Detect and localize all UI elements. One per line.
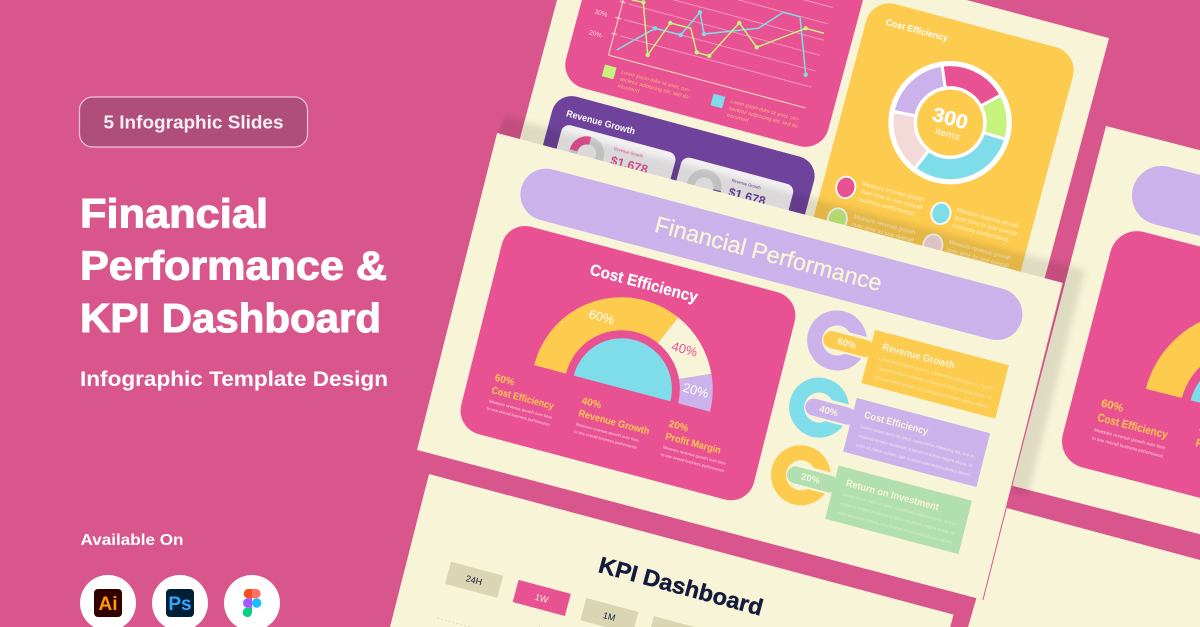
legend: profit margin: 20% xyxy=(667,419,690,435)
legend: revenue growth: 40% xyxy=(580,396,603,412)
item: 40% cost efficiency xyxy=(781,371,993,487)
axis label: 20%: 20% xyxy=(588,29,603,40)
donut chart: items xyxy=(934,126,962,142)
donut chart: 300 xyxy=(930,104,970,134)
item: 60% revenue growth xyxy=(799,304,1011,419)
axis label: 30%: 30% xyxy=(594,9,608,19)
button: 1W: 1W xyxy=(534,592,550,605)
icon: Adobe Illustrator: Ai xyxy=(98,594,118,615)
button: fourth range xyxy=(648,616,706,627)
button: 24H: 24H xyxy=(465,573,483,587)
title: Performance & xyxy=(80,242,387,288)
item: 20% return on investment: Return on Investment xyxy=(845,478,941,514)
legend item: blush: Measure revenue growth xyxy=(948,240,1012,262)
legend: cost efficiency: Measure revenue growth over time xyxy=(488,398,553,420)
icon: Adobe Illustrator xyxy=(80,575,136,627)
legend item: lime: business performance xyxy=(848,230,907,251)
heading: KPI Dashboard: KPI Dashboard xyxy=(596,552,766,621)
slide: lower right slide xyxy=(968,507,1200,627)
line chart series xyxy=(617,0,824,77)
item: 20% return on investment: Lorem ipsum dolor sit amet, consectetur adipiscing elit, sed do xyxy=(842,492,958,527)
card: pink revenue: Revenue Growth xyxy=(613,146,644,159)
left column background xyxy=(0,0,557,627)
badge: 5 Infographic Slides xyxy=(80,97,308,147)
header pill: Financial Performance xyxy=(652,211,885,296)
legend item: blush: over time to see overall xyxy=(946,247,1010,270)
slide: main Financial Performance xyxy=(417,133,1063,600)
legend item: pink: over time to see overall xyxy=(859,189,923,212)
panel: revenue growth xyxy=(524,92,819,287)
legend: profit margin: Profit Margin xyxy=(664,431,722,457)
subtitle: Infographic Template Design xyxy=(80,368,388,391)
panel: right slide gauge: Cost Efficiency xyxy=(1096,412,1169,442)
button: 24H xyxy=(445,562,503,598)
legend: revenue growth: Measure revenue growth over time xyxy=(575,421,640,443)
card: purple revenue xyxy=(662,156,795,263)
legend text: cyan: Lorem ipsum dolor sit amet, con- xyxy=(730,99,800,123)
item: 20% return on investment: 20% xyxy=(800,471,821,487)
legend text: cyan: eiusmod xyxy=(726,112,750,124)
legend: profit margin: Measure revenue growth over time xyxy=(662,444,727,466)
legend item: pink xyxy=(834,174,926,219)
item: 60% revenue growth: eiusmod tempor incididunt ut labore et dolore magna aliqua. Ut xyxy=(876,365,992,400)
legend item: blush: business performance xyxy=(944,255,1002,276)
item: 40% cost efficiency: enim ad minim veniam, quis nostrud exercitation ullamco laboris xyxy=(856,442,972,478)
icon: Adobe Photoshop: Ps xyxy=(168,594,192,615)
item: 20% return on investment: enim ad minim veniam, quis nostrud exercitation ullamco laboris xyxy=(837,510,953,545)
legend item: pink: Measure revenue growth xyxy=(861,181,925,204)
legend item: lime xyxy=(825,206,917,252)
item: 40% cost efficiency: eiusmod tempor incididunt ut labore et dolore magna aliqua. Ut xyxy=(858,433,974,468)
card: pink revenue xyxy=(543,123,677,231)
legend item: cyan xyxy=(929,201,1020,246)
card: purple revenue: Revenue Growth xyxy=(731,178,762,190)
legend: profit margin: to see overall business performance xyxy=(661,452,725,473)
panel: right slide gauge: 60% xyxy=(1100,398,1125,415)
slide: KPI dashboard xyxy=(386,474,954,627)
panel: right slide gauge xyxy=(1056,225,1200,546)
item: 60% revenue growth: Revenue Growth xyxy=(881,342,956,372)
gauge chart: 60% xyxy=(587,306,616,328)
label: Available On: Available On xyxy=(80,532,184,549)
legend item: cyan: over time to see overall xyxy=(954,215,1018,238)
panel: line chart xyxy=(560,0,875,152)
legend text: lime: Lorem ipsum dolor sit amet, con- xyxy=(621,70,691,94)
donut chart xyxy=(875,47,1026,198)
legend text: cyan xyxy=(726,99,800,137)
legend: revenue growth: to see overall business performance xyxy=(574,429,638,450)
legend swatch: lime xyxy=(602,65,617,79)
heading: cost efficiency: Cost Efficiency xyxy=(885,17,949,43)
title xyxy=(80,190,387,341)
heading: revenue growth: Revenue Growth xyxy=(565,108,636,137)
legend item: blush xyxy=(920,232,1012,278)
legend item: lime: over time to see overall xyxy=(851,222,915,244)
legend swatch: cyan xyxy=(711,94,725,108)
item: 60% revenue growth: enim ad minim veniam, quis nostrud exercitation ullamco laboris xyxy=(874,374,990,410)
legend: revenue growth xyxy=(574,396,654,452)
legend item: lime: Measure revenue growth xyxy=(853,214,917,237)
legend text: lime: eiusmod xyxy=(617,83,641,95)
item: 20% return on investment: eiusmod tempor incididunt ut labore et dolore magna aliqua. Ut xyxy=(840,501,956,536)
pill: right slide header xyxy=(1125,160,1200,363)
main slide shadow xyxy=(445,116,1085,495)
header pill xyxy=(515,163,1028,346)
title: Financial xyxy=(80,190,268,236)
item: 40% cost efficiency: Cost Efficiency xyxy=(863,410,930,438)
legend: cost efficiency xyxy=(487,373,560,427)
item: 40% cost efficiency: Lorem ipsum dolor sit amet, consectetur adipiscing elit, sed do xyxy=(860,424,976,459)
panel: right slide gauge: Measure revenue growth over time xyxy=(1094,427,1166,451)
card: pink revenue: $1,678 xyxy=(609,154,649,177)
button: 1M: 1M xyxy=(602,610,617,623)
slide: right slide duplicate xyxy=(1012,126,1200,627)
slide: top slide with chart and donut xyxy=(486,0,1114,405)
panel: right slide gauge: to see overall business performance xyxy=(1092,435,1164,459)
legend item: cyan: Measure revenue growth xyxy=(956,208,1020,230)
legend text: cyan: sectetur adipiscing elit, sed do xyxy=(728,106,798,130)
badge: 5 Infographic Slides: 5 Infographic Slides xyxy=(104,112,284,132)
legend item: pink: business performance xyxy=(857,197,915,218)
panel: cost efficiency donut xyxy=(787,0,1079,372)
legend item: cyan: business performance xyxy=(952,223,1010,244)
gauge chart: 20% xyxy=(681,380,711,401)
button: 1M xyxy=(580,598,638,627)
card: purple revenue: $1,678 xyxy=(727,185,767,209)
legend: revenue growth: Revenue Growth xyxy=(577,408,650,438)
item: 60% revenue growth: 60% xyxy=(836,336,858,352)
legend: cost efficiency: to see overall business performance xyxy=(487,406,551,427)
button: 1W xyxy=(513,580,571,616)
legend: cost efficiency: Cost Efficiency xyxy=(490,385,555,412)
heading: cost efficiency: Cost Efficiency xyxy=(588,262,700,307)
legend text: lime: sectetur adipiscing elit, sed do xyxy=(619,76,689,101)
item: 60% revenue growth: Lorem ipsum dolor sit amet, consectetur adipiscing elit, sed do xyxy=(879,356,994,391)
legend: profit margin xyxy=(661,419,734,473)
panel: cost efficiency gauge xyxy=(455,221,801,506)
icon: Adobe Photoshop xyxy=(152,575,208,627)
item: 40% cost efficiency: 40% xyxy=(818,404,840,420)
item: 20% return on investment xyxy=(763,439,975,554)
title: KPI Dashboard xyxy=(80,295,381,341)
gauge chart xyxy=(534,277,732,412)
legend: cost efficiency: 60% xyxy=(493,373,516,388)
gauge chart: 40% xyxy=(670,339,699,360)
legend text: lime xyxy=(617,70,691,107)
icon: Figma xyxy=(224,575,280,627)
